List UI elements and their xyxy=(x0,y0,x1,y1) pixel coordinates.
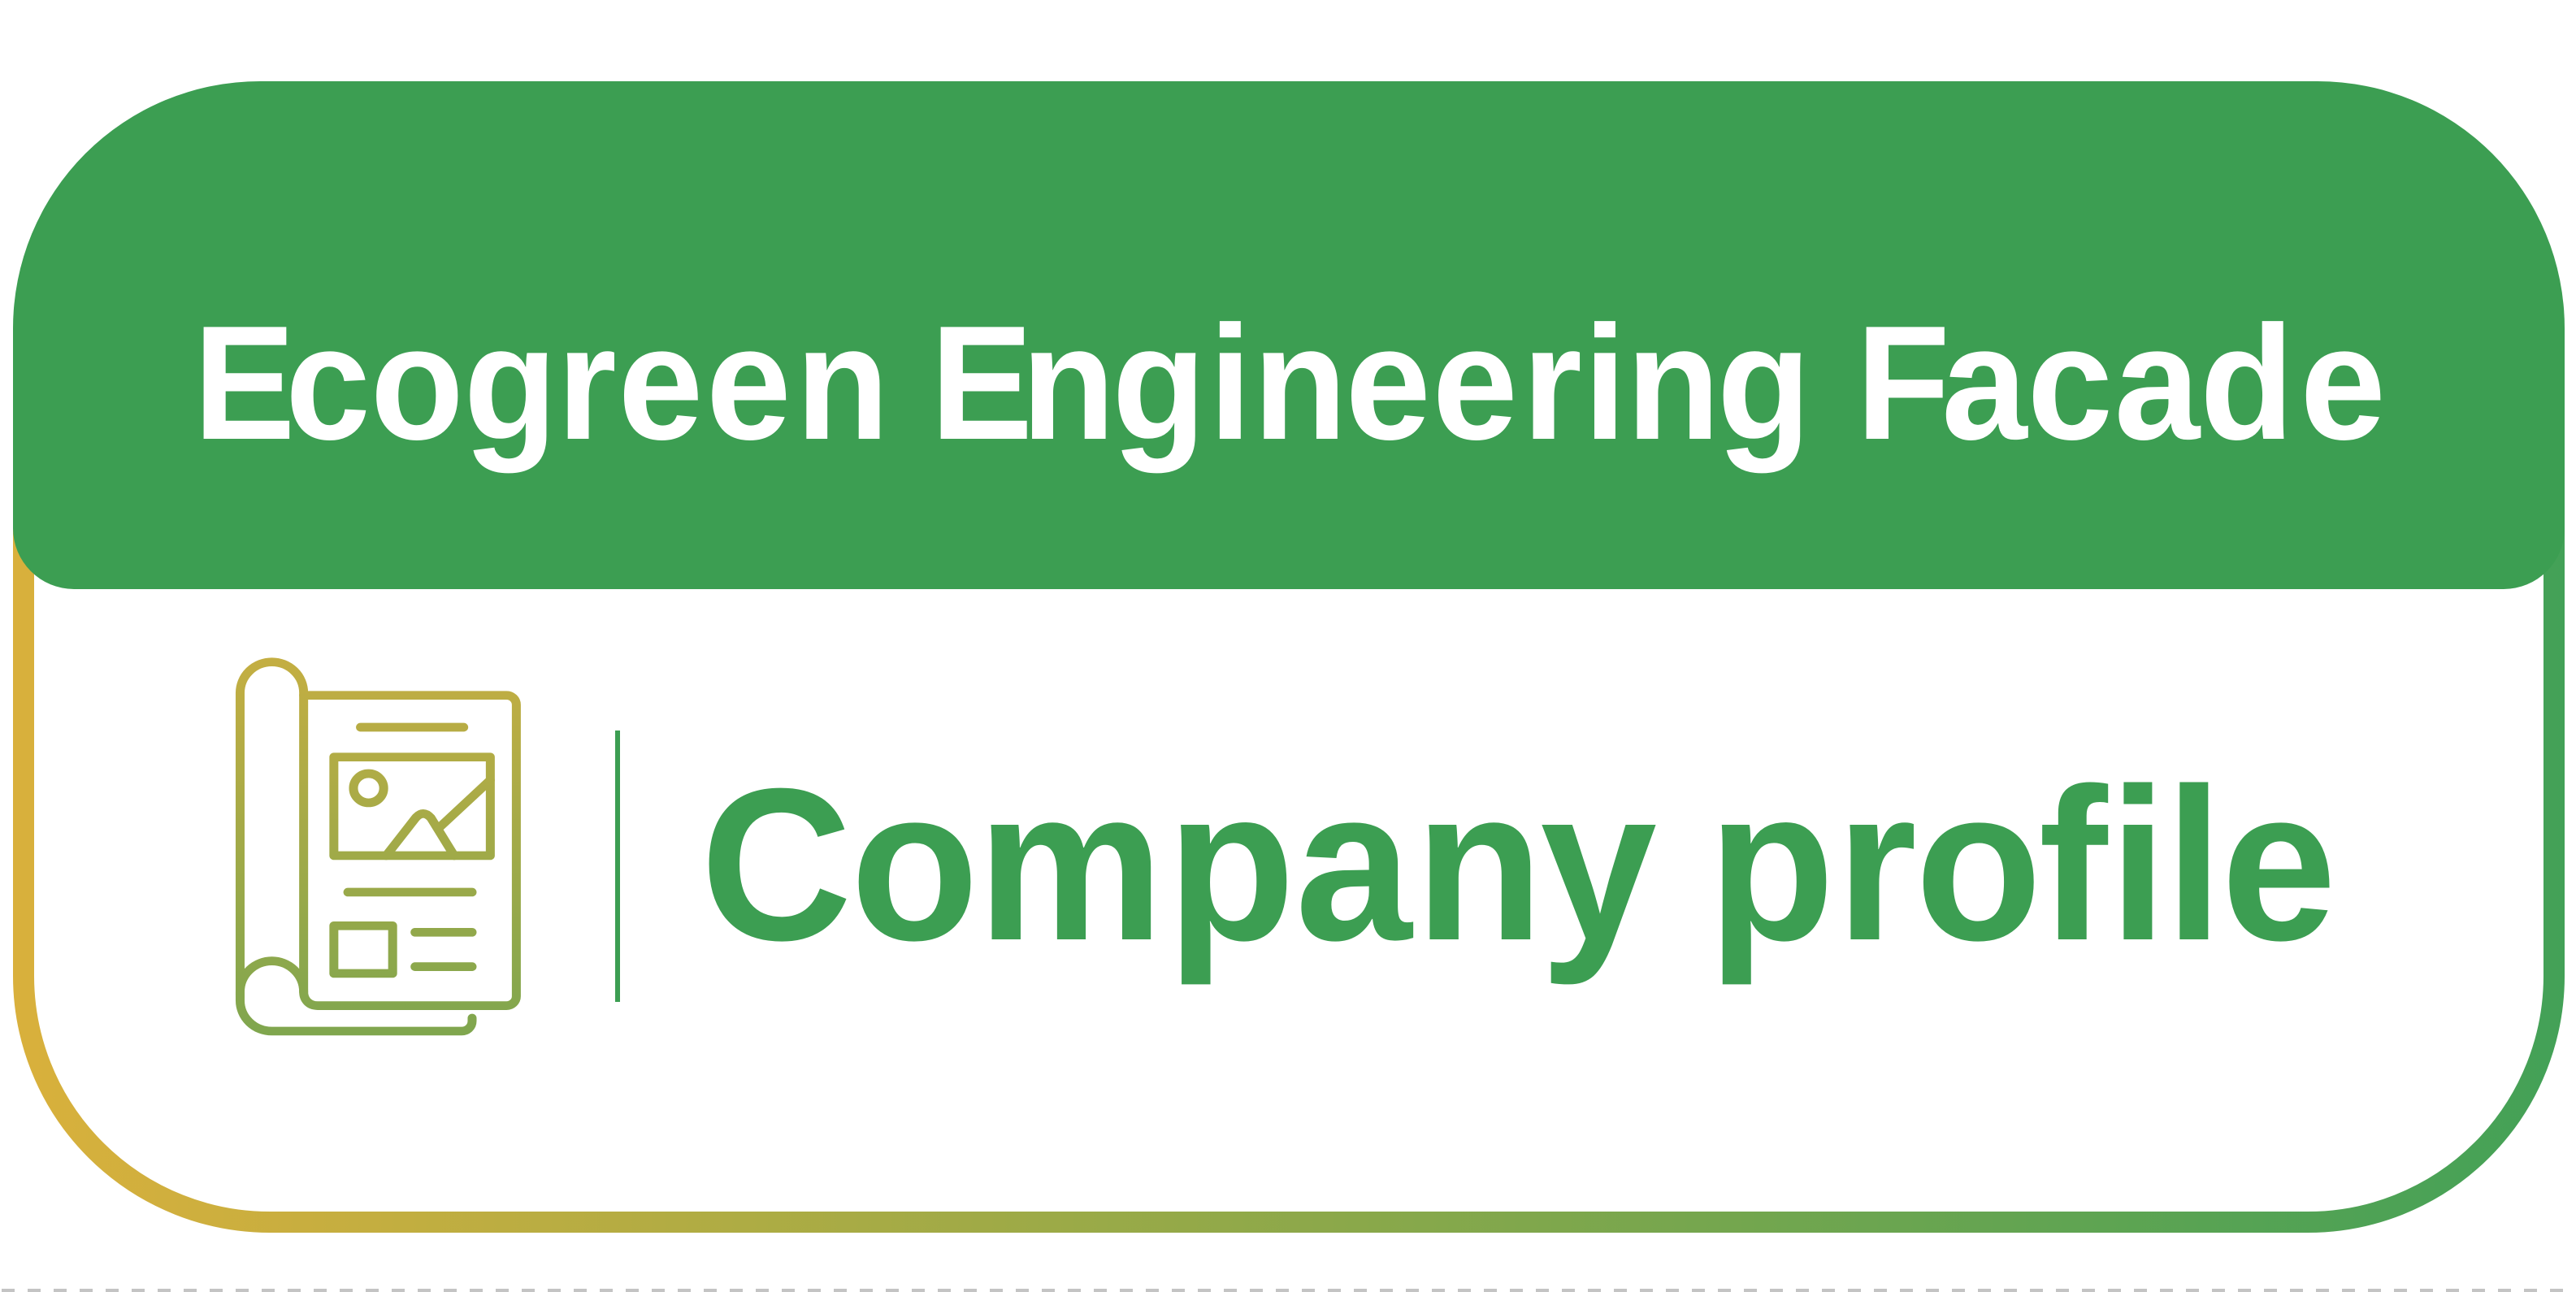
headline line xyxy=(361,714,464,740)
icon: rolled brochure xyxy=(240,662,516,1031)
picture sun xyxy=(353,774,384,803)
bottom curl xyxy=(240,997,472,1031)
vertical divider xyxy=(615,731,620,1002)
small image box xyxy=(334,926,392,973)
heading: Company profile xyxy=(700,743,2336,986)
header panel xyxy=(13,81,2565,589)
text line one xyxy=(415,919,472,945)
subheading line xyxy=(348,879,472,905)
brochure roll xyxy=(240,662,304,995)
heading word: profile: profile xyxy=(1708,744,2336,986)
picture ridge xyxy=(440,780,490,827)
title xyxy=(193,293,2386,474)
title word: Ecogreen: Ecogreen xyxy=(193,293,889,474)
title word: Facade: Facade xyxy=(1856,293,2386,474)
text line two xyxy=(415,954,472,980)
picture mountain xyxy=(386,813,454,856)
title word: Engineering: Engineering xyxy=(930,293,1811,474)
card outline with gold to green gradient xyxy=(24,406,2554,1222)
brochure page xyxy=(240,696,516,1006)
header background xyxy=(13,81,2565,589)
picture frame xyxy=(334,757,490,856)
heading word: Company: Company xyxy=(700,743,1659,986)
dashed bottom rule xyxy=(2,1289,2576,1292)
